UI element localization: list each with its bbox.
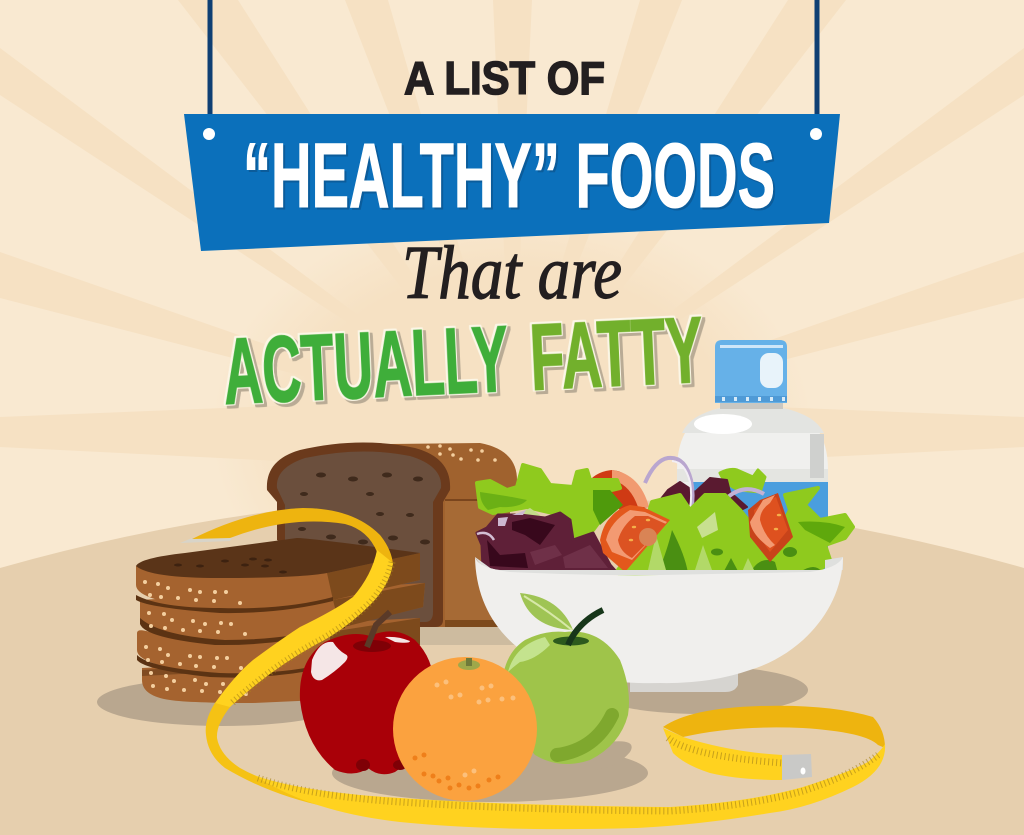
front slice crust <box>267 442 450 627</box>
water <box>692 482 828 572</box>
apple stem <box>568 610 603 645</box>
tape end band <box>663 728 782 780</box>
left lettuce <box>477 465 620 540</box>
tape bottom band <box>254 744 885 829</box>
heading: that are: That are <box>402 231 622 315</box>
second slice <box>140 583 425 642</box>
stacked bread slices <box>136 538 425 703</box>
salad <box>477 458 853 575</box>
top slice face <box>136 538 420 578</box>
slice seeds <box>143 580 248 696</box>
loaf side <box>390 443 517 627</box>
ground shadows <box>97 625 808 802</box>
tape measure, upper section <box>180 508 393 728</box>
orange stem <box>458 660 480 670</box>
bowl body <box>475 557 843 683</box>
apple bottom dimples <box>356 759 370 771</box>
table surface <box>0 496 1024 835</box>
bottom slice <box>142 660 320 703</box>
tape back left curve <box>206 703 327 807</box>
bottle body <box>677 408 828 560</box>
tape bottom band ticks <box>258 755 878 811</box>
third slice <box>137 618 420 676</box>
top slice <box>136 553 420 610</box>
big tomato wedge <box>600 505 670 572</box>
back tomato <box>592 470 649 510</box>
apple stem <box>367 612 390 647</box>
tape S band <box>208 550 393 728</box>
red apple <box>300 612 434 774</box>
lettuce dark folds <box>658 530 822 573</box>
heading: actually fatty: ACTUALLY <box>221 306 511 424</box>
apple lower shade <box>557 715 612 755</box>
loaf seeds <box>426 444 497 462</box>
onion ring <box>645 458 693 517</box>
apple highlight <box>311 642 348 680</box>
bread holes <box>298 472 430 544</box>
water bottle <box>677 340 828 572</box>
crumb holes <box>174 558 287 574</box>
tape back right curve <box>663 706 885 748</box>
right tomato wedge <box>748 493 793 562</box>
heading: a list of: A LIST OF <box>404 52 605 104</box>
blue banner <box>184 114 840 251</box>
orange peel dots <box>434 680 516 778</box>
tape back curve <box>192 508 393 565</box>
green apple <box>502 593 629 764</box>
heading: actually fatty: FATTY <box>528 297 705 410</box>
back lettuce <box>720 469 765 492</box>
salad bowl <box>475 557 843 692</box>
tape tip <box>180 538 232 543</box>
bowl rim <box>475 557 843 575</box>
tape measure, lower section <box>206 703 885 829</box>
red lettuce <box>477 513 617 573</box>
bread loaf <box>267 442 517 627</box>
bowl foot <box>630 670 738 692</box>
sign hanger wires <box>210 0 817 116</box>
orange <box>393 657 537 801</box>
front slice face <box>277 451 441 622</box>
tape metal tab <box>782 754 812 780</box>
bottle cap <box>715 340 787 403</box>
left lettuce dark folds <box>480 492 527 510</box>
hanging sign with title <box>184 0 840 251</box>
apple leaf <box>520 593 573 630</box>
banner holes <box>203 128 822 140</box>
right lettuce mass <box>618 488 853 575</box>
back purple leaves <box>660 478 747 520</box>
